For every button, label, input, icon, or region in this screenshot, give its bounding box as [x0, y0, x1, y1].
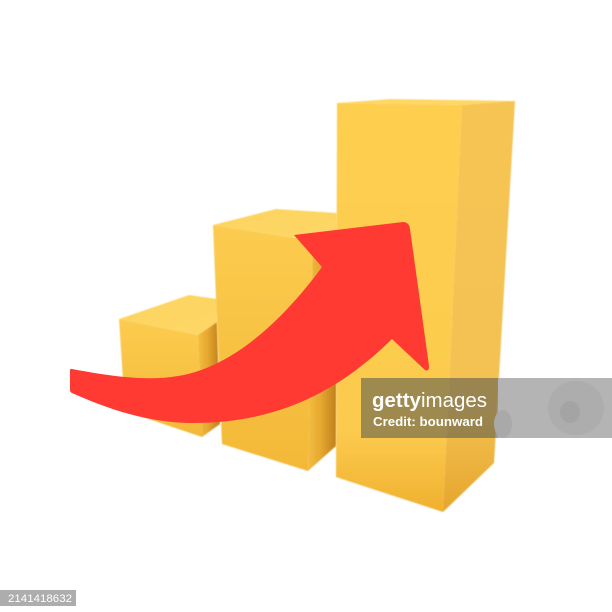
bar: tall: [336, 99, 515, 512]
watermark: credit line: Credit: bounward: [373, 415, 483, 429]
watermark: getty images logo: gettyimages: [372, 390, 487, 412]
arrow: rising red: [70, 222, 429, 423]
image id tag: [0, 590, 76, 606]
watermark: grey band: [361, 378, 612, 438]
bar: small: [119, 295, 220, 437]
bar: medium: [213, 209, 337, 471]
image id tag: 2141418632: [8, 593, 72, 605]
